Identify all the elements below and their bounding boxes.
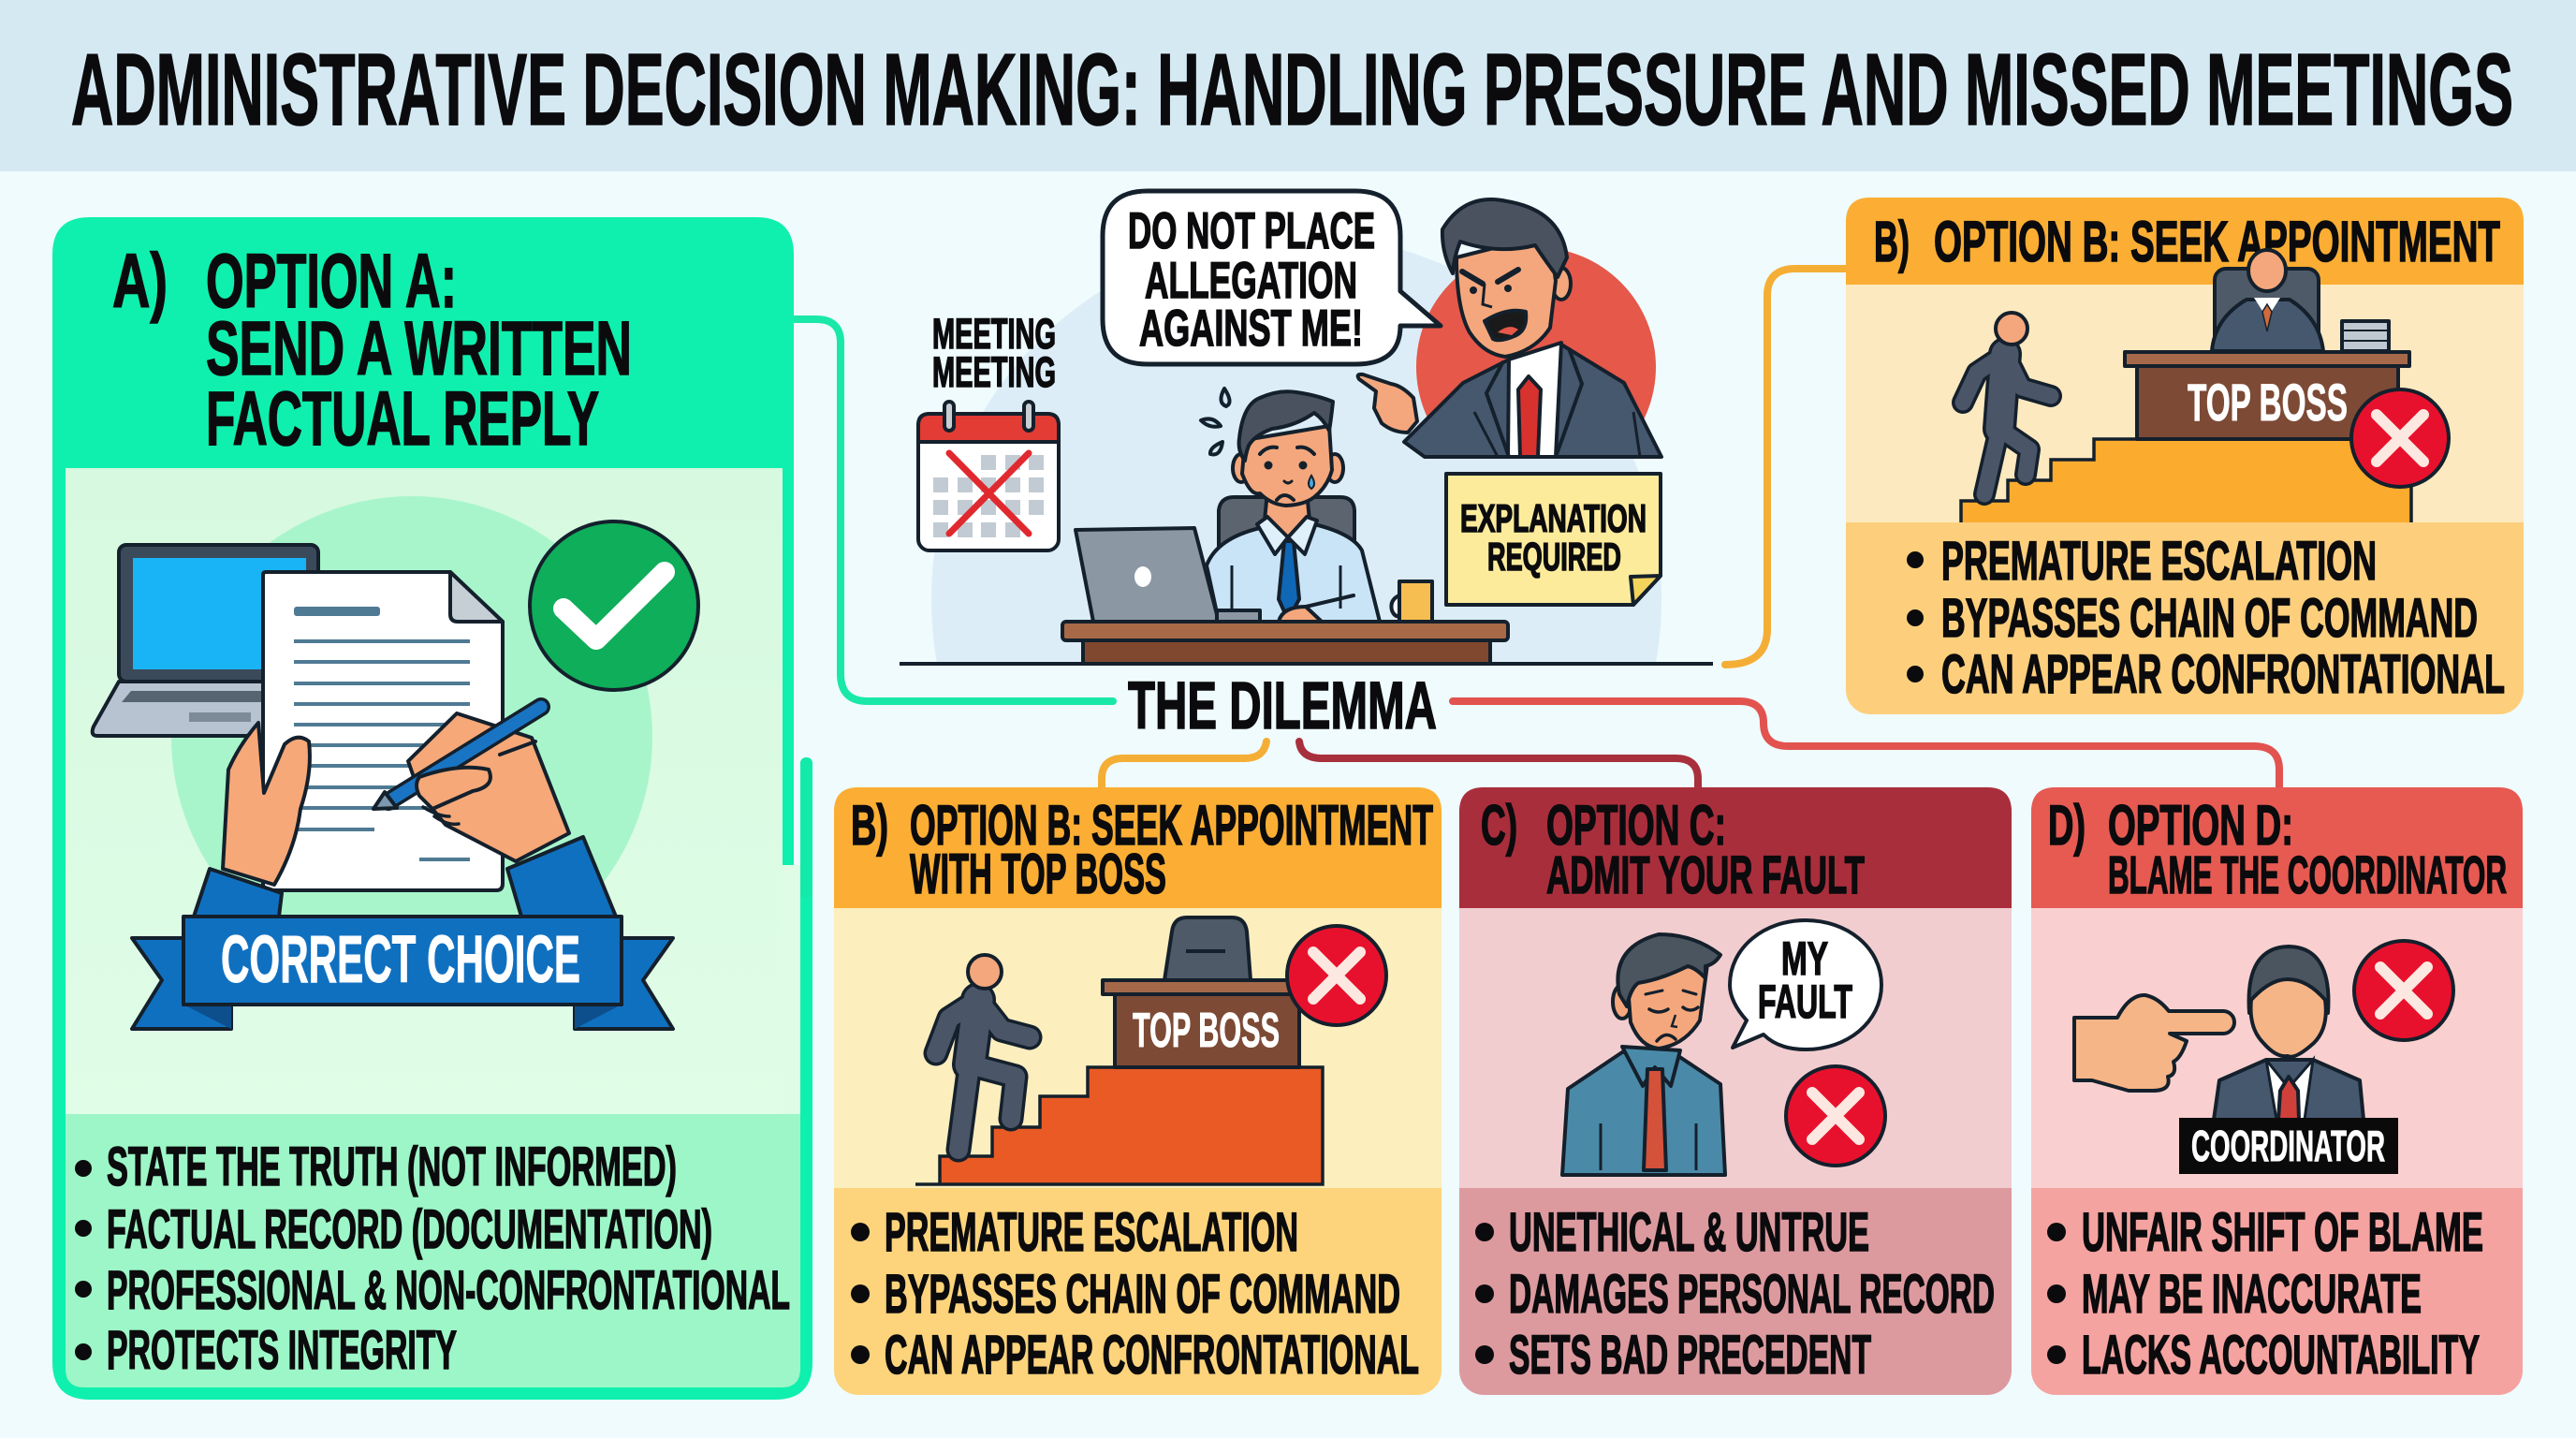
- speech bubble: my fault: [1730, 920, 1881, 1049]
- icon: red X: [2351, 389, 2449, 487]
- list: option C points: UNETHICAL & UNTRUE: [1509, 1202, 1869, 1263]
- list: option A points: PROTECTS INTEGRITY: [107, 1320, 457, 1381]
- icon: red X: [2354, 941, 2453, 1040]
- connector: dilemma to option A: [794, 319, 1113, 701]
- heading: option D: OPTION D:: [2108, 794, 2293, 857]
- climbing figure: [936, 955, 1030, 1150]
- list: option B points: PREMATURE ESCALATION: [885, 1202, 1298, 1263]
- list: option B points: CAN APPEAR CONFRONTATIONAL: [885, 1325, 1419, 1386]
- seated boss: [2212, 250, 2389, 351]
- note: explanation required: REQUIRED: [1487, 535, 1621, 579]
- heading: option C: OPTION C:: [1546, 794, 1726, 857]
- list: option A points: FACTUAL RECORD (DOCUMENTATION): [107, 1199, 712, 1260]
- illustration: stairs and empty chair: [915, 917, 1386, 1184]
- icon: laptop: [93, 545, 318, 736]
- icon: pointing hand: [2074, 995, 2234, 1091]
- icon: right hand with pen: [373, 707, 616, 917]
- heading: option B: B): [1874, 210, 1910, 273]
- icon: red X: [1287, 926, 1386, 1025]
- empty chair: [1164, 917, 1251, 980]
- list: option D points: [2047, 1202, 2483, 1386]
- list: option B points: [851, 1202, 1419, 1386]
- label: meeting meeting: [932, 310, 1056, 396]
- list: option B points: [1907, 531, 2505, 705]
- heading: option A: OPTION A:: [206, 239, 457, 324]
- panel: option A: [52, 217, 812, 1400]
- label: coordinator: COORDINATOR: [2191, 1122, 2385, 1170]
- panel: option B lower: [834, 787, 1442, 1395]
- icon: check mark: [530, 521, 698, 690]
- label: meeting meeting: MEETING: [932, 348, 1056, 396]
- label: coordinator: [2179, 1118, 2398, 1174]
- heading: option B: OPTION B: SEEK APPOINTMENT: [910, 794, 1433, 857]
- list: option A points: STATE THE TRUTH (NOT INFORMED): [107, 1137, 677, 1197]
- heading: option B: [851, 794, 1433, 905]
- illustration: man admitting fault: [1562, 920, 1885, 1175]
- sad man: [1562, 934, 1725, 1175]
- list: option C points: DAMAGES PERSONAL RECORD: [1509, 1264, 1995, 1325]
- list: option A points: [75, 1137, 790, 1381]
- title band: [0, 0, 2576, 171]
- speech bubble: my fault: FAULT: [1758, 976, 1852, 1028]
- worried employee: [1201, 389, 1380, 622]
- list: option C points: SETS BAD PRECEDENT: [1509, 1325, 1871, 1386]
- desk: top boss: TOP BOSS: [1133, 1004, 1280, 1058]
- speech bubble: do not place allegation: [1103, 191, 1441, 364]
- connector: dilemma to option C: [1299, 741, 1698, 788]
- heading: option A: SEND A WRITTEN: [206, 306, 632, 391]
- list: option B points: BYPASSES CHAIN OF COMMAND: [885, 1264, 1400, 1325]
- illustration: writing a factual reply: [93, 496, 698, 1029]
- panel: option C: [1459, 787, 2012, 1395]
- heading: option A: [112, 239, 632, 462]
- ribbon: correct choice: [132, 917, 673, 1029]
- speech bubble: do not place allegation: DO NOT PLACE: [1128, 201, 1375, 259]
- angry boss: [1358, 199, 1661, 487]
- icon: laptop on desk: [1076, 528, 1260, 622]
- desk: top boss: [2125, 352, 2409, 439]
- illustration: the dilemma scene: [900, 189, 1713, 729]
- desk: [1062, 622, 1508, 664]
- speech bubble: do not place allegation: AGAINST ME!: [1139, 299, 1363, 357]
- icon: document: [263, 572, 503, 890]
- climbing figure: [1963, 313, 2051, 494]
- illustration: stairs to top boss: [1961, 250, 2449, 522]
- speech bubble: my fault: MY: [1781, 932, 1828, 985]
- desk: top boss: [1103, 980, 1299, 1067]
- coordinator figure: [2214, 946, 2364, 1120]
- note: explanation required: [1446, 474, 1661, 605]
- connector: dilemma to top right option B: [1725, 269, 1847, 665]
- heading: option C: ADMIT YOUR FAULT: [1546, 845, 1865, 905]
- heading: option C: C): [1481, 794, 1517, 857]
- list: option C points: [1475, 1202, 1995, 1386]
- desk: top boss: TOP BOSS: [2188, 373, 2348, 432]
- heading: option C: [1481, 794, 1865, 905]
- heading: option A: FACTUAL REPLY: [206, 376, 599, 462]
- pointing hand: [1358, 374, 1417, 433]
- connector: dilemma to lower option B: [1102, 741, 1266, 788]
- icon: coffee mug: [1391, 581, 1432, 622]
- panel: option B top right: [1846, 198, 2524, 714]
- connector: dilemma to option D: [1453, 701, 2279, 788]
- heading: option D: [2048, 794, 2507, 905]
- note: explanation required: EXPLANATION: [1460, 496, 1647, 540]
- speech bubble: do not place allegation: ALLEGATION: [1145, 251, 1357, 309]
- heading: the dilemma: THE DILEMMA: [1128, 669, 1437, 743]
- heading: option D: D): [2048, 794, 2086, 857]
- list: option A points: PROFESSIONAL & NON-CONFRONTATIONAL: [107, 1260, 790, 1321]
- label: meeting meeting: MEETING: [932, 310, 1056, 358]
- icon: left hand: [194, 723, 310, 917]
- heading: option A: A): [112, 239, 168, 324]
- heading: option B: B): [851, 794, 888, 857]
- illustration: blaming the coordinator: [2074, 941, 2453, 1174]
- icon: red X: [1786, 1066, 1885, 1166]
- panel: option D: [2031, 787, 2523, 1395]
- icon: calendar crossed out: [918, 402, 1059, 550]
- ribbon: correct choice: CORRECT CHOICE: [221, 923, 580, 997]
- heading: option B: WITH TOP BOSS: [910, 843, 1166, 905]
